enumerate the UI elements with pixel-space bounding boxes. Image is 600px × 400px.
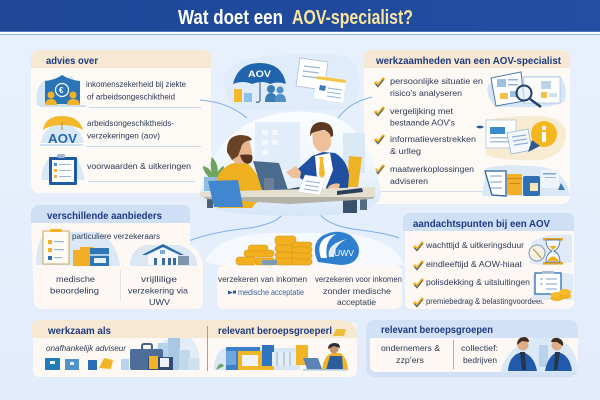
icon: clock and hourglass <box>529 235 572 265</box>
checklist: werkzaamheden: & urlleg <box>390 147 421 156</box>
text: medische acceptatie: medische acceptatie <box>238 288 304 297</box>
checklist: aandachtspunten: premiebedrag & belastingvoordeel. <box>426 297 544 306</box>
icon: UWV logo: UWV <box>334 249 355 258</box>
icons: small office items <box>45 358 129 370</box>
text: vrijwillige verzekering via UWV: UWV <box>149 297 170 307</box>
text: zonder medische acceptatie: acceptatie <box>337 298 377 307</box>
chair: client <box>208 180 243 207</box>
text: vrijwillige verzekering via UWV: vrijllilige <box>141 274 177 284</box>
adviser <box>286 122 349 192</box>
panel: verschillende aanbieders <box>31 205 203 309</box>
chair: adviser <box>347 156 362 187</box>
title: Wat doet een <box>178 7 283 29</box>
icon: floating documents <box>296 58 346 103</box>
checklist: werkzaamheden <box>375 77 483 186</box>
checklist: werkzaamheden: informatieverstrekken <box>390 135 476 144</box>
icon: clipboard and folders <box>36 229 120 266</box>
text: collectief bedrijven: bedrijven <box>463 355 497 365</box>
heading: advies over: advies over <box>46 55 98 67</box>
text: verzekeren voor inkomen: verzekeren voor inkomen <box>315 275 402 284</box>
illustration: AOV umbrella and documents <box>224 55 360 110</box>
icon: AOV umbrella: AOV <box>48 132 78 146</box>
checklist: werkzaamheden: vergelijking met <box>390 107 454 116</box>
checklist: werkzaamheden: bestaande AOV's <box>390 118 455 128</box>
text: vrijwillige verzekering via UWV: verzekering via <box>128 286 188 296</box>
document on desk <box>298 175 326 195</box>
icon: AOV umbrella <box>40 116 84 146</box>
icon: office buildings <box>214 345 308 370</box>
title: AOV-specialist? <box>292 7 413 29</box>
icon: checklist, folder and bag <box>482 165 570 196</box>
panel: werkzaamheden <box>364 50 570 204</box>
text: voorwaarden: voorwaarden & uitkeringen <box>87 162 191 171</box>
heading: aandachtspunten: aandachtspunten bij een AOV <box>413 218 550 230</box>
text: zonder medische acceptatie: zonder medische <box>323 287 392 296</box>
checklist: aandachtspunten: eindleeftijd & AOW-hiaat <box>426 260 523 269</box>
icon: documents with magnifier <box>487 72 566 107</box>
monitor <box>253 161 300 192</box>
text: inkomenszekerheid: inkomenszekerheid bij ziekte <box>86 80 187 89</box>
panel: aandachtspunten <box>403 213 574 309</box>
client <box>216 135 269 208</box>
icon: house <box>130 244 197 266</box>
tablet <box>337 188 363 195</box>
text: ondernemers en zzp'ers: ondernemers & <box>381 343 440 353</box>
panel: relevant beroepsgroepen <box>366 320 578 377</box>
text: particuliere verzekeraars: particuliere verzekeraars <box>72 232 160 241</box>
icon: buildings <box>151 338 200 370</box>
icon: euro shield with people: € <box>59 86 64 95</box>
checklist: aandachtspunten <box>414 241 544 306</box>
heading: verschillende aanbieders: verschillende aanbieders <box>47 210 162 222</box>
text: arbeidsongeschiktheids: arbeidsongeschiktheids- <box>87 119 174 128</box>
text: inkomenszekerheid: of arbeidsongeschiktheid <box>87 92 175 102</box>
icon: clipboard <box>42 154 85 185</box>
checklist: aandachtspunten: polisdekking & uitsluitingen <box>426 278 530 287</box>
icon: person at laptop <box>303 343 348 370</box>
desk <box>200 187 375 213</box>
connector lines <box>186 97 399 242</box>
text: collectief bedrijven: collectief: <box>461 343 498 353</box>
heading: relevant beroepsgroepen: relevant beroepsgroepen <box>381 324 493 336</box>
icon: documents with info bubble <box>476 116 566 160</box>
icon: plant <box>203 157 224 191</box>
heading: werkzaamheden: werkzaamheden van een AOV-specialist <box>375 55 561 67</box>
checklist: aandachtspunten: wachttijd & uitkeringsduur <box>425 241 524 250</box>
heading: werkzaam als: werkzaam als <box>47 325 111 337</box>
text: onafhankelijk adviseur: onafhankelijk adviseur <box>46 344 126 353</box>
icon: gold bar <box>333 329 346 336</box>
header banner <box>0 0 600 35</box>
text: arbeidsongeschiktheids: verzekeringen (aov) <box>87 132 160 140</box>
text: medische beoordeling: medische <box>56 274 95 284</box>
checklist: werkzaamheden: maatwerkoplossingen <box>390 165 474 174</box>
background dome <box>199 112 381 216</box>
icon: coins <box>236 236 312 265</box>
panel: werkzaam als / relevant beroepsgroepen <box>31 320 357 377</box>
checklist: werkzaamheden: persoonlijke situatie en <box>390 77 483 86</box>
illustration: two businessmen <box>500 337 578 372</box>
icon: AOV umbrella: AOV <box>248 69 272 80</box>
text: medische beoordeling: beoordeling <box>50 286 99 296</box>
icon: euro shield with people <box>36 75 86 107</box>
panel: advies over <box>31 50 211 193</box>
panel: verzekeren van inkomen <box>205 232 404 309</box>
text: ondernemers en zzp'ers: zzp'ers <box>396 355 424 365</box>
text: verzekeren van inkomen: verzekeren van inkomen <box>218 275 307 284</box>
checklist: werkzaamheden: risico's analyseren <box>390 89 462 98</box>
heading: relevant beroepsgroepen: relevant beroepsgroeperl <box>218 325 332 337</box>
icon: UWV logo <box>315 232 359 265</box>
illustration: adviser meeting with client <box>199 112 381 216</box>
icon: briefcase <box>130 344 173 370</box>
icon: clipboard and coins <box>533 271 573 301</box>
checklist: werkzaamheden: adviseren <box>390 177 428 186</box>
